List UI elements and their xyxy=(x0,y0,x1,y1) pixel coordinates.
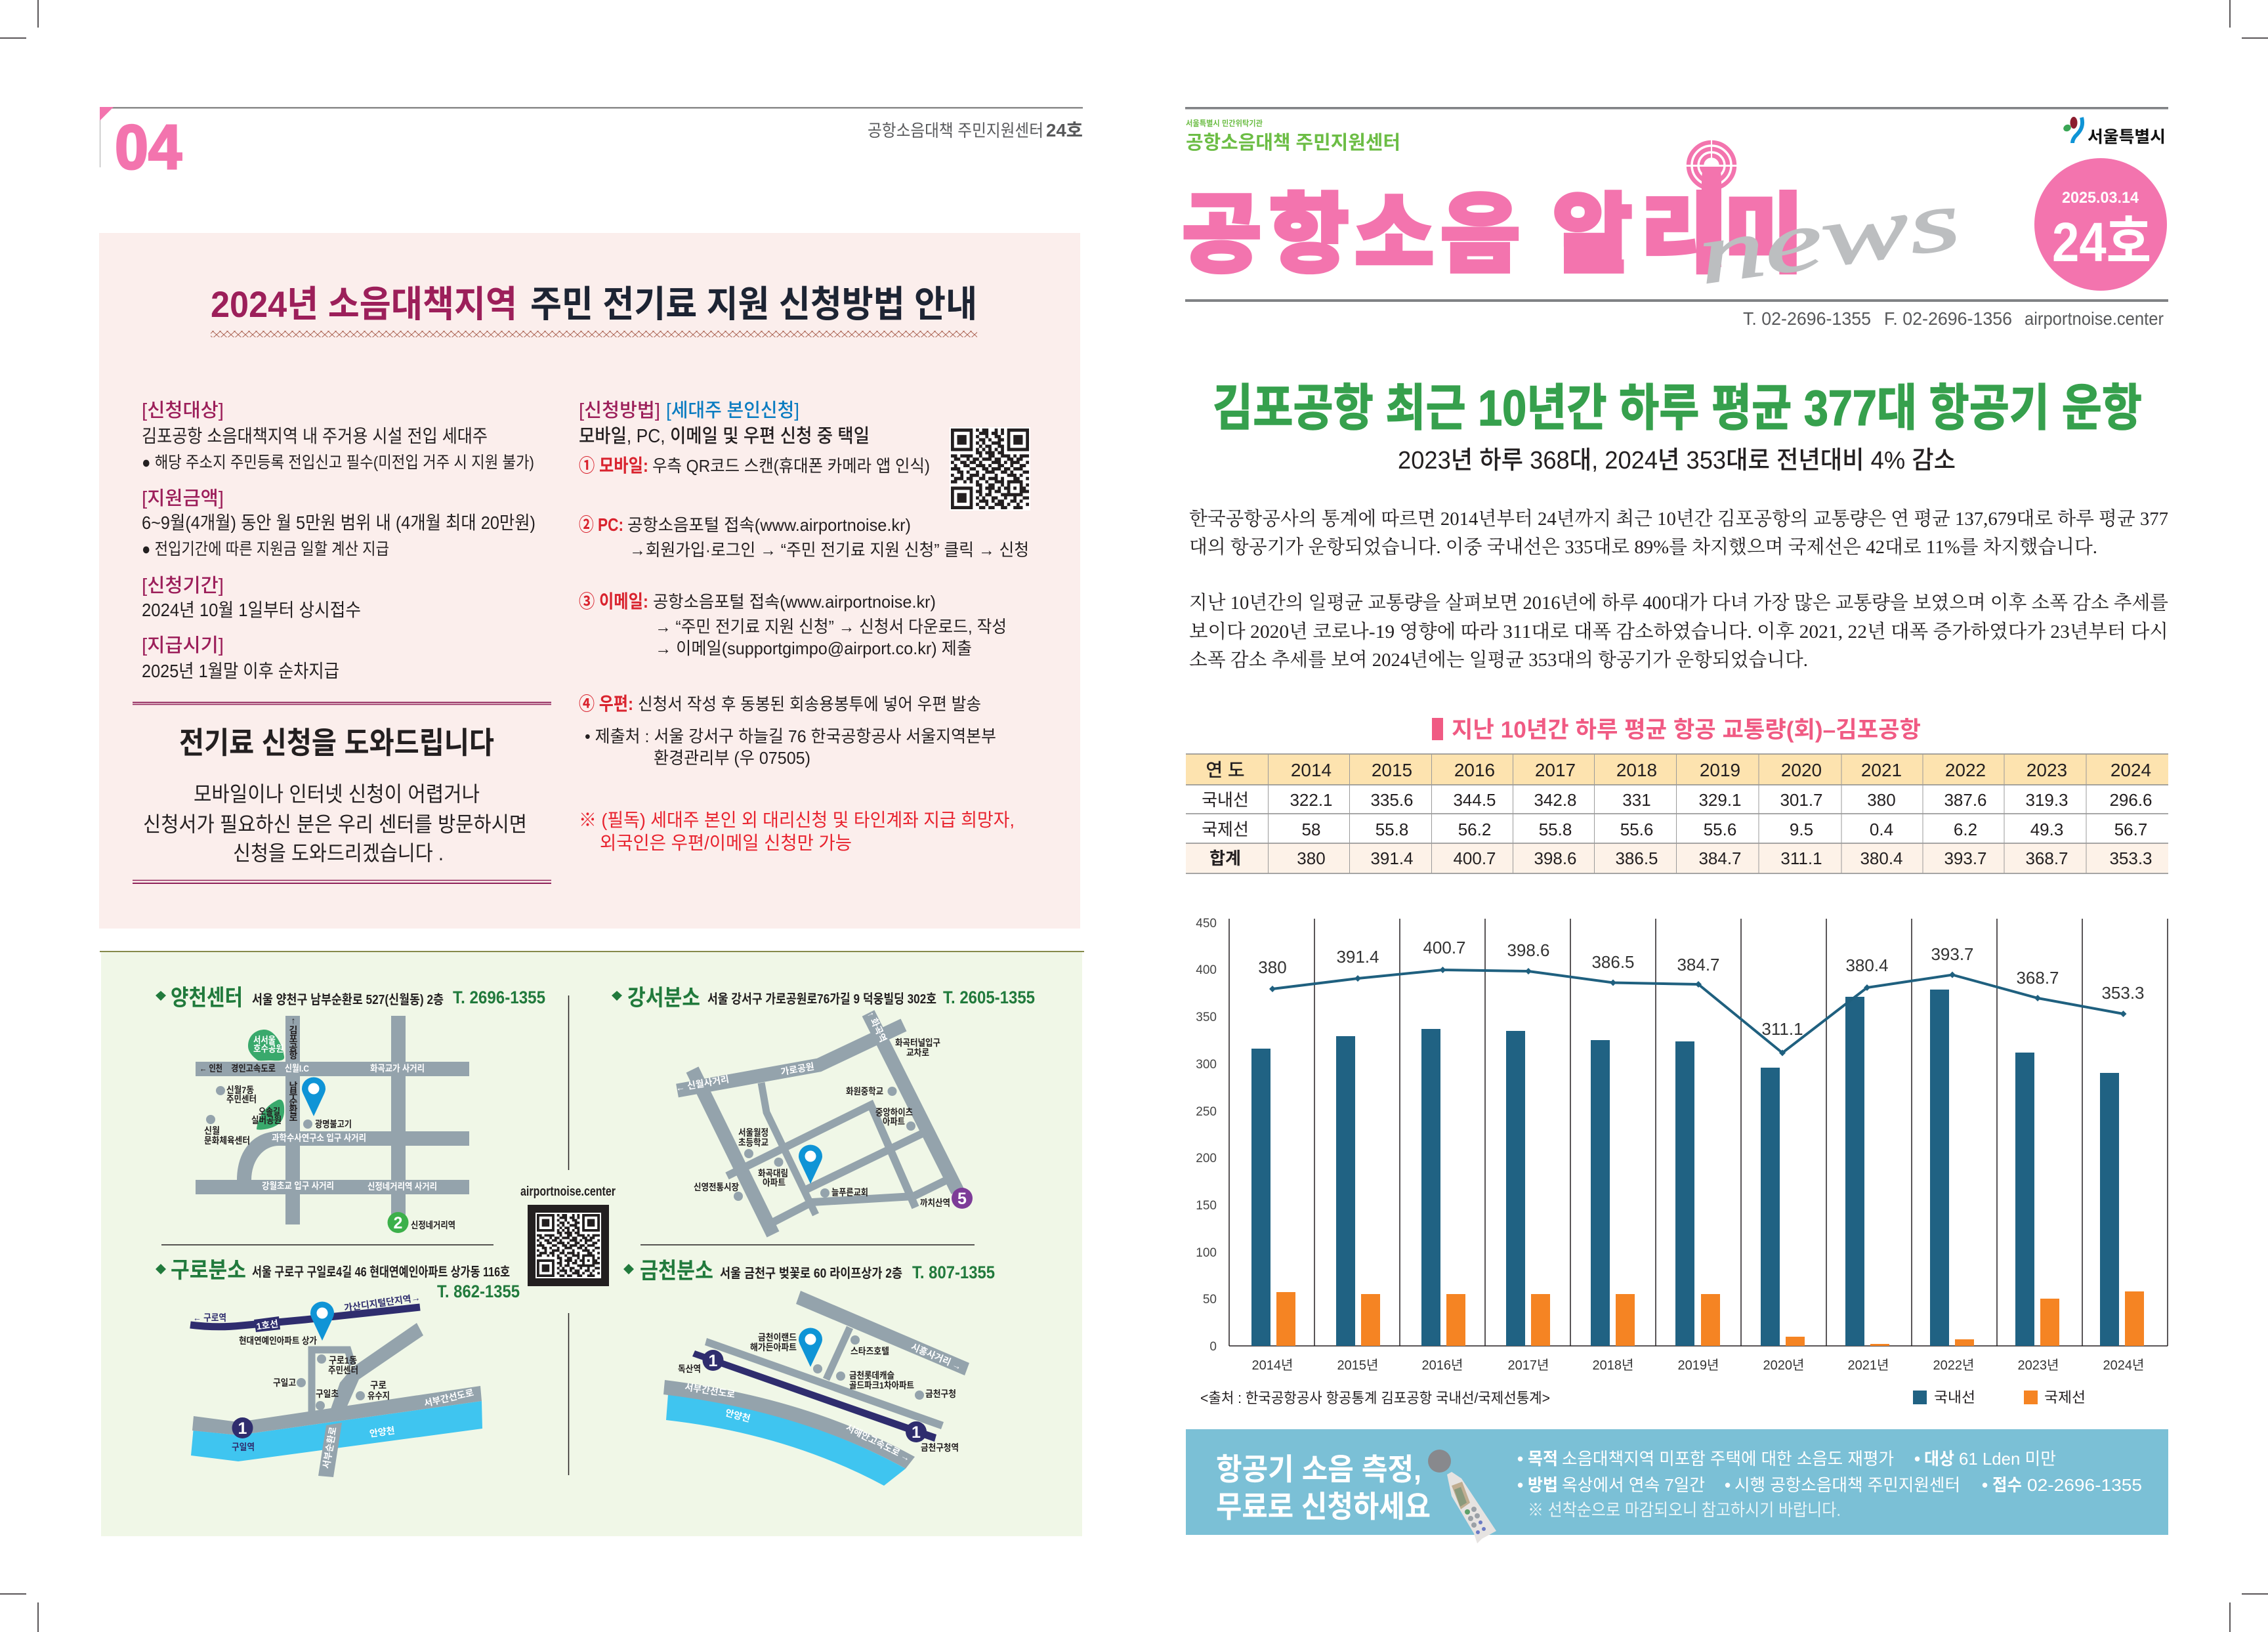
article text: 한국공항공사의 통계에 따르면 2014년부터 24년까지 최근 10년간 김포공항의 교통량은 연 평균 137,679대로 하루 평균 377 xyxy=(1189,508,2168,530)
total row: 합계 xyxy=(1209,848,1241,868)
x axis labels: 2015년 xyxy=(1337,1358,1378,1373)
map: Yangcheon center xyxy=(156,986,545,1233)
banner: free noise measurement xyxy=(1186,1429,2168,1543)
table header row: 2023 xyxy=(2026,760,2067,780)
map: Gangseo branch: 서울월정 xyxy=(738,1127,768,1138)
heading: Yangcheon xyxy=(156,986,545,1011)
subway marker 1 xyxy=(232,1417,253,1438)
map: Yangcheon center: 서서울 xyxy=(253,1035,276,1045)
banner details: 대상 xyxy=(1924,1449,1954,1469)
line value labels: 391.4 xyxy=(1336,947,1379,967)
subway marker 1: 1 xyxy=(238,1419,247,1438)
x axis labels: 2023년 xyxy=(2018,1358,2059,1373)
banner details: • xyxy=(1517,1449,1523,1469)
international row: 49.3 xyxy=(2030,820,2063,839)
map: Yangcheon center: 호수공원 xyxy=(253,1043,284,1054)
total line xyxy=(1269,967,2126,1057)
domestic row: 319.3 xyxy=(2025,790,2068,810)
x axis labels: 2022년 xyxy=(1933,1358,1974,1373)
map: Geumcheon branch: 금천구청 xyxy=(925,1389,956,1399)
subway marker 2: 2 xyxy=(394,1214,402,1232)
international row: 국제선 xyxy=(1202,820,1249,839)
table header row: 2018 xyxy=(1616,760,1657,780)
application methods text: 공항소음포털 접속(www.airportnoise.kr) xyxy=(627,515,911,535)
callout: help with application: 신청서가 필요하신 분은 우리 센터를 방문하시면 xyxy=(143,812,527,836)
source note: <출처 : 한국공항공사 항공통계 김포공항 국내선/국제선통계> xyxy=(1200,1390,1550,1406)
table header row xyxy=(1206,760,2151,780)
line value labels: 400.7 xyxy=(1423,938,1466,957)
heading: Yangcheon: 양천센터 xyxy=(171,986,243,1011)
map: Geumcheon branch: 해가든아파트 xyxy=(750,1342,797,1352)
map: Gangseo branch: 아파트 xyxy=(883,1116,905,1127)
total row: 400.7 xyxy=(1453,848,1496,868)
map: Geumcheon branch: 스타즈호텔 xyxy=(850,1346,889,1356)
map: Geumcheon branch: 서부간선도로 xyxy=(684,1381,736,1400)
article text: 대의 항공기가 운항되었습니다. 이중 국내선은 335대로 89%를 차지했으며 국제선은 42대로 11%를 차지했습니다. xyxy=(1189,536,2097,558)
total row: 380 xyxy=(1297,848,1326,868)
banner details: • xyxy=(1914,1449,1920,1469)
map: Geumcheon branch: 골드파크1차아파트 xyxy=(849,1380,914,1391)
legend: 국제선 xyxy=(2044,1389,2086,1406)
map: Geumcheon branch: 안양천 xyxy=(724,1407,751,1424)
map: Gangseo branch: 중앙하이츠 xyxy=(875,1107,913,1118)
international row: 58 xyxy=(1302,820,1320,839)
heading: Yangcheon: 서울 양천구 남부순환로 527(신월동) 2층 xyxy=(252,992,444,1007)
x axis labels: 2017년 xyxy=(1508,1358,1549,1373)
table header row: 2022 xyxy=(1945,760,1986,780)
map: Gangseo branch: 까치산역 xyxy=(920,1198,950,1208)
application methods text: → 이메일(supportgimpo@airport.co.kr) 제출 xyxy=(655,638,972,658)
eligibility and schedule text: 김포공항 소음대책지역 내 주거용 시설 전입 세대주 xyxy=(142,426,488,446)
banner details: • xyxy=(1725,1475,1731,1495)
map: Yangcheon center: 신월7동 xyxy=(226,1085,254,1095)
article text: 지난 10년간의 일평균 교통량을 살펴보면 2016년에 하루 400대가 다녀 가장 많은 교통량을 보였으며 이후 소폭 감소 추세를 xyxy=(1189,592,2168,614)
eligibility and schedule text: 2024년 10월 1일부터 상시접수 xyxy=(142,600,361,620)
map: Guro branch: 구로 xyxy=(370,1380,387,1391)
map: Geumcheon branch: 금천이랜드 xyxy=(758,1332,797,1343)
icon: map pin xyxy=(799,1144,822,1184)
domestic row: 344.5 xyxy=(1453,790,1496,810)
heading xyxy=(211,283,977,325)
callout: help with application: 신청을 도와드리겠습니다 . xyxy=(233,841,444,865)
map: Guro branch: 구일고 xyxy=(273,1377,296,1388)
y axis labels: 400 xyxy=(1196,963,1217,977)
website label and QR code: airportnoise.center xyxy=(520,1184,616,1199)
application methods text: →회원가입·로그인 → “주민 전기료 지원 신청” 클릭 → 신청 xyxy=(629,540,1029,560)
contact line xyxy=(1743,308,2164,329)
total row: 353.3 xyxy=(2109,848,2152,868)
callout: help with application: 전기료 신청을 도와드립니다 xyxy=(179,726,494,760)
application methods text: 우측 QR코드 스캔(휴대폰 카메라 앱 인식) xyxy=(652,456,930,476)
banner details: • xyxy=(1517,1475,1523,1495)
legend: 국내선 xyxy=(1934,1389,1975,1406)
subheadline: 2023년 하루 368대, 2024년 353대로 전년대비 4% 감소 xyxy=(1398,447,1956,474)
y axis labels: 100 xyxy=(1196,1246,1217,1260)
line value labels xyxy=(1258,938,2145,1039)
subway markers 1: 1 xyxy=(912,1423,921,1442)
contact line: F. 02-2696-1356 xyxy=(1884,308,2012,329)
line value labels: 368.7 xyxy=(2016,968,2059,988)
banner details: 61 Lden 미만 xyxy=(1959,1449,2056,1469)
application methods text: [신청방법] xyxy=(579,400,660,421)
map: Yangcheon center: 신정네거리역 사거리 xyxy=(368,1181,437,1192)
subway markers 1 xyxy=(702,1350,927,1442)
eligibility and schedule text: [지급시기] xyxy=(142,635,224,656)
total row: 311.1 xyxy=(1780,848,1822,868)
website label and QR code xyxy=(520,1184,616,1286)
international row: 6.2 xyxy=(1954,820,1977,839)
issue badge: 2025.03.14 xyxy=(2062,189,2139,207)
x axis labels: 2014년 xyxy=(1252,1358,1293,1373)
x axis labels: 2016년 xyxy=(1422,1358,1463,1373)
international bars xyxy=(1276,1291,2144,1346)
domestic row: 329.1 xyxy=(1698,790,1742,810)
map: Guro branch: 구로1동 xyxy=(329,1355,357,1366)
map: Geumcheon branch: 금천구청역 xyxy=(921,1442,959,1453)
table header row: 연 도 xyxy=(1206,760,1245,780)
map: Guro branch: 구일초 xyxy=(316,1389,339,1399)
application methods text: 환경관리부 (우 07505) xyxy=(654,748,810,768)
map: Yangcheon center: 오솔길 xyxy=(259,1106,280,1117)
international row: 0.4 xyxy=(1870,820,1893,839)
y axis labels: 350 xyxy=(1196,1011,1217,1024)
legend xyxy=(1913,1389,2086,1406)
icon: pink corner tab xyxy=(100,107,114,121)
callout: help with application: 모바일이나 인터넷 신청이 어렵거나 xyxy=(194,782,480,806)
x axis labels: 2024년 xyxy=(2103,1358,2144,1373)
domestic row: 380 xyxy=(1867,790,1896,810)
application methods text: ② PC: xyxy=(579,514,623,535)
banner details: • xyxy=(1982,1475,1988,1495)
international row: 55.8 xyxy=(1376,820,1408,839)
article text xyxy=(1189,508,2168,671)
total row: 368.7 xyxy=(2025,848,2068,868)
domestic bars xyxy=(1251,990,2119,1346)
application methods text: → “주민 전기료 지원 신청” → 신청서 다운로드, 작성 xyxy=(655,617,1007,637)
heading: Geumcheon xyxy=(623,1259,995,1284)
subway marker 2 xyxy=(387,1212,408,1233)
map: Gangseo branch: 화곡대림 xyxy=(758,1168,788,1179)
map: Yangcheon center: 광명불고기 xyxy=(315,1119,352,1129)
table header row: 2019 xyxy=(1700,760,1740,780)
eligibility and schedule text: [신청기간] xyxy=(142,575,224,596)
international row: 56.2 xyxy=(1458,820,1491,839)
heading: Geumcheon: 금천분소 xyxy=(640,1259,713,1284)
y axis labels: 50 xyxy=(1203,1293,1217,1307)
table header row: 2015 xyxy=(1372,760,1412,780)
domestic row: 387.6 xyxy=(1944,790,1987,810)
map: Geumcheon branch: 시흥사거리 → xyxy=(910,1341,963,1372)
application methods text: ④ 우편: xyxy=(579,694,633,714)
table heading: 지난 10년간 하루 평균 항공 교통량(회)–김포공항 xyxy=(1452,717,1921,743)
domestic row: 331 xyxy=(1622,790,1651,810)
total row: 386.5 xyxy=(1615,848,1658,868)
page number: 04 xyxy=(115,112,182,182)
table header row: 2021 xyxy=(1861,760,1902,780)
international row: 55.6 xyxy=(1704,820,1736,839)
map: Guro branch: 안양천 xyxy=(369,1425,396,1439)
organization name: 공항소음대책 주민지원센터 xyxy=(1186,132,1400,154)
banner heading: 항공기 소음 측정, xyxy=(1216,1452,1421,1486)
eligibility and schedule text: ● 전입기간에 따른 지원금 일할 계산 지급 xyxy=(142,540,389,558)
map: Gangseo branch: 화곡터널입구 xyxy=(895,1037,940,1048)
logo: Seoul: 서울특별시 xyxy=(2088,128,2166,146)
banner details: 시행 공항소음대책 주민지원센터 xyxy=(1734,1475,1960,1495)
icon: map pin xyxy=(799,1328,822,1367)
domestic row: 296.6 xyxy=(2109,790,2152,810)
y axis labels: 300 xyxy=(1196,1058,1217,1072)
map: Geumcheon branch: 금천롯데캐슬 xyxy=(849,1370,894,1381)
article text: 소폭 감소 추세를 보여 2024년에는 일평균 353대의 항공기가 운항되었습니다. xyxy=(1189,649,1808,671)
international row: 9.5 xyxy=(1790,820,1813,839)
domestic row xyxy=(1202,790,2152,810)
map: Guro branch: 현대연예인아파트 상가 xyxy=(239,1335,317,1346)
map: Gangseo branch: ↑ 화곡역 xyxy=(866,1010,889,1044)
left page header xyxy=(100,107,1083,182)
road network xyxy=(677,1013,957,1234)
panel: electricity support guide xyxy=(99,233,1080,929)
domestic row: 322.1 xyxy=(1290,790,1333,810)
map: Guro branch: ← 구로역 xyxy=(193,1312,226,1323)
x axis labels: 2019년 xyxy=(1678,1358,1719,1373)
banner details: 목적 xyxy=(1528,1449,1558,1469)
eligibility and schedule text: 2025년 1월말 이후 순차지급 xyxy=(142,661,339,681)
y axis labels: 450 xyxy=(1196,917,1217,931)
contact line: airportnoise.center xyxy=(2025,308,2164,329)
banner details xyxy=(1517,1449,2142,1520)
total row: 384.7 xyxy=(1698,848,1742,868)
domestic row: 국내선 xyxy=(1202,790,1249,810)
article text: 보이다 2020년 코로나-19 영향에 따라 311대로 대폭 감소하였습니다. 이후 2021, 22년 대폭 증가하였다가 23년부터 다시 xyxy=(1189,621,2168,642)
table header row: 2014 xyxy=(1291,760,1332,780)
heading: Geumcheon: T. 807-1355 xyxy=(912,1263,995,1282)
total row: 380.4 xyxy=(1860,848,1903,868)
map: Geumcheon branch xyxy=(623,1259,995,1486)
issue badge xyxy=(2034,158,2167,291)
contact line: T. 02-2696-1355 xyxy=(1743,308,1871,329)
total row xyxy=(1209,848,2152,868)
international row: 55.6 xyxy=(1620,820,1653,839)
domestic row: 335.6 xyxy=(1370,790,1414,810)
map: Gangseo branch: ← 신월사거리 xyxy=(675,1074,730,1093)
line value labels: 386.5 xyxy=(1591,952,1635,972)
map: Gangseo branch: 가로공원 xyxy=(780,1061,815,1077)
line value labels: 398.6 xyxy=(1507,940,1550,960)
map: Yangcheon center: ↑김포공항 xyxy=(289,1015,298,1060)
map: Guro branch: 구일역 xyxy=(232,1442,255,1452)
eligibility and schedule text: 6~9월(4개월) 동안 월 5만원 범위 내 (4개월 최대 20만원) xyxy=(142,513,536,533)
heading: Geumcheon: 서울 금천구 벚꽃로 60 라이프상가 2층 xyxy=(720,1266,902,1281)
green parks xyxy=(248,1030,284,1130)
icon: sound level meter xyxy=(1428,1450,1496,1543)
organization name xyxy=(1186,118,1400,154)
banner details: 옥상에서 연속 7일간 xyxy=(1562,1475,1705,1495)
notice in red: 외국인은 우편/이메일 신청만 가능 xyxy=(600,833,852,853)
heading: Yangcheon: T. 2696-1355 xyxy=(453,988,545,1007)
road network xyxy=(196,1016,469,1224)
data table xyxy=(1186,754,2168,873)
map: Yangcheon center: 주민센터 xyxy=(226,1094,257,1104)
line value labels: 380 xyxy=(1258,957,1287,977)
international row xyxy=(1202,820,2147,839)
table header row: 2020 xyxy=(1781,760,1822,780)
callout: help with application xyxy=(143,726,527,865)
total row: 391.4 xyxy=(1370,848,1414,868)
application methods text: 모바일, PC, 이메일 및 우편 신청 중 택일 xyxy=(579,425,870,447)
international row: 56.7 xyxy=(2114,820,2147,839)
map: Geumcheon branch: 서해안고속도로 → xyxy=(844,1422,912,1463)
y axis labels: 200 xyxy=(1196,1152,1217,1165)
heading: Guro: 서울 구로구 구일로4길 46 현대연예인아파트 상가동 116호 xyxy=(252,1265,510,1280)
banner details: 방법 xyxy=(1528,1475,1558,1495)
international row: 55.8 xyxy=(1539,820,1572,839)
heading: Gangseo: T. 2605-1355 xyxy=(943,988,1035,1007)
banner details: ※ 선착순으로 마감되오니 참고하시기 바랍니다. xyxy=(1528,1500,1841,1520)
x axis labels: 2021년 xyxy=(1848,1358,1889,1373)
river and roads xyxy=(190,1307,482,1477)
map: Guro branch: 가산디지털단지역→ xyxy=(343,1292,421,1313)
icon: map pin xyxy=(310,1302,334,1341)
heading: Gangseo: 강서분소 xyxy=(627,986,700,1011)
map: Yangcheon center: 신월 xyxy=(204,1125,220,1136)
issue badge: 24호 xyxy=(2052,211,2151,273)
running head: 24호 xyxy=(1046,120,1083,140)
application methods text: • 제출처 : 서울 강서구 하늘길 76 한국공항공사 서울지역본부 xyxy=(585,726,996,746)
table header row: 2016 xyxy=(1454,760,1495,780)
application methods text: 신청서 작성 후 동봉된 회송용봉투에 넣어 우편 발송 xyxy=(638,694,981,714)
map: Yangcheon center: 문화체육센터 xyxy=(204,1135,250,1146)
y axis labels: 0 xyxy=(1209,1340,1217,1354)
map: Guro branch: 주민센터 xyxy=(328,1365,358,1375)
QR code xyxy=(950,427,1030,511)
news script: news xyxy=(1692,172,1965,303)
y axis labels xyxy=(1196,917,1217,1354)
banner heading: 무료로 신청하세요 xyxy=(1216,1490,1431,1524)
total row: 393.7 xyxy=(1944,848,1987,868)
map: Yangcheon center: 화곡교가 사거리 xyxy=(370,1063,425,1074)
x axis labels: 2020년 xyxy=(1763,1358,1804,1373)
table header row: 2017 xyxy=(1535,760,1576,780)
river and roads xyxy=(663,1291,969,1486)
heading: Guro: 구로분소 xyxy=(171,1258,246,1283)
domestic row: 342.8 xyxy=(1534,790,1577,810)
panel: center locations xyxy=(100,951,1084,1536)
heading: Guro xyxy=(156,1258,520,1301)
heading: Guro: T. 862-1355 xyxy=(437,1282,520,1301)
banner details: 접수 xyxy=(1992,1475,2022,1495)
subway marker 5 xyxy=(952,1188,973,1209)
eligibility and schedule text: [지원금액] xyxy=(142,488,224,509)
map: Gangseo branch: 아파트 xyxy=(763,1177,786,1188)
map: Yangcheon center: 신정네거리역 xyxy=(411,1220,455,1230)
application methods text: ① 모바일: xyxy=(579,455,648,476)
heading: 주민 전기료 지원 신청방법 안내 xyxy=(530,283,977,325)
heading: Gangseo xyxy=(612,986,1035,1011)
masthead xyxy=(1182,107,2168,329)
subway marker 5: 5 xyxy=(957,1190,967,1208)
banner details: 02-2696-1355 xyxy=(2027,1475,2142,1495)
map: Guro branch xyxy=(156,1258,520,1477)
y axis labels: 150 xyxy=(1196,1199,1217,1213)
running head: 공항소음대책 주민지원센터 xyxy=(868,121,1043,140)
map: Gangseo branch xyxy=(612,986,1035,1234)
domestic row: 301.7 xyxy=(1780,790,1823,810)
total row: 398.6 xyxy=(1534,848,1577,868)
notice in red xyxy=(579,810,1015,853)
map: Guro branch: 유수지 xyxy=(368,1391,390,1401)
headline: 김포공항 최근 10년간 하루 평균 377대 항공기 운항 xyxy=(1213,381,2142,436)
map: Guro branch: 서부간선도로 xyxy=(423,1387,474,1409)
table header row: 2024 xyxy=(2110,760,2151,780)
eligibility and schedule text xyxy=(142,400,536,681)
eligibility and schedule text: ● 해당 주소지 주민등록 전입신고 필수(미전입 거주 시 지원 불가) xyxy=(142,453,534,472)
map: Gangseo branch: 교차로 xyxy=(906,1047,929,1058)
application methods text: ③ 이메일: xyxy=(579,591,648,612)
map: Yangcheon center: 경인고속도로 xyxy=(231,1063,276,1074)
map: Gangseo branch: 늘푸른교회 xyxy=(831,1187,868,1198)
icon: antenna rings xyxy=(1686,139,1737,267)
notice in red: ※ (필독) 세대주 본인 외 대리신청 및 타인계좌 지급 희망자, xyxy=(579,810,1015,830)
map: Geumcheon branch: 독산역 xyxy=(678,1364,701,1374)
title: 공항소음 알리미 xyxy=(1182,186,1803,283)
map: Yangcheon center: 과학수사연구소 입구 사거리 xyxy=(272,1133,366,1143)
line value labels: 393.7 xyxy=(1931,944,1974,964)
x axis labels: 2018년 xyxy=(1593,1358,1633,1373)
map: Guro branch: 서부순환로 xyxy=(321,1426,339,1469)
map: Yangcheon center: 신월I.C xyxy=(285,1063,309,1074)
chart: daily air traffic xyxy=(1196,917,2168,1373)
map: Gangseo branch: 초등학교 xyxy=(738,1137,768,1148)
map: Gangseo branch: 화원중학교 xyxy=(846,1086,883,1097)
map: Guro branch: 1호선 xyxy=(256,1318,279,1331)
x axis labels xyxy=(1252,1358,2144,1373)
application methods text: [세대주 본인신청] xyxy=(666,400,799,421)
map: Yangcheon center: 강월초교 입구 사거리 xyxy=(262,1181,334,1191)
map: Yangcheon center: 남부순환로 xyxy=(289,1081,298,1123)
icon: map pin xyxy=(302,1078,326,1116)
banner heading xyxy=(1216,1452,1431,1524)
heading: 2024년 소음대책지역 xyxy=(211,283,517,325)
line value labels: 311.1 xyxy=(1761,1019,1803,1039)
y axis labels: 250 xyxy=(1196,1105,1217,1119)
organization name: 서울특별시 민간위탁기관 xyxy=(1186,118,1263,128)
application methods text xyxy=(579,400,1029,768)
line value labels: 384.7 xyxy=(1677,955,1720,974)
banner details: 소음대책지역 미포함 주택에 대한 소음도 재평가 xyxy=(1562,1449,1894,1469)
line value labels: 353.3 xyxy=(2101,983,2145,1003)
application methods text: 공항소음포털 접속(www.airportnoise.kr) xyxy=(653,592,936,612)
map: Gangseo branch: 신영전통시장 xyxy=(694,1182,739,1192)
logo: Seoul xyxy=(2062,117,2166,146)
subway markers 1: 1 xyxy=(709,1352,718,1370)
line value labels: 380.4 xyxy=(1845,955,1889,975)
eligibility and schedule text: [신청대상] xyxy=(142,400,224,421)
heading: Gangseo: 서울 강서구 가로공원로76가길 9 덕웅빌딩 302호 xyxy=(707,992,936,1007)
map: Yangcheon center: ← 인천 xyxy=(200,1063,222,1074)
map: Yangcheon center: 실버공원 xyxy=(251,1115,282,1125)
